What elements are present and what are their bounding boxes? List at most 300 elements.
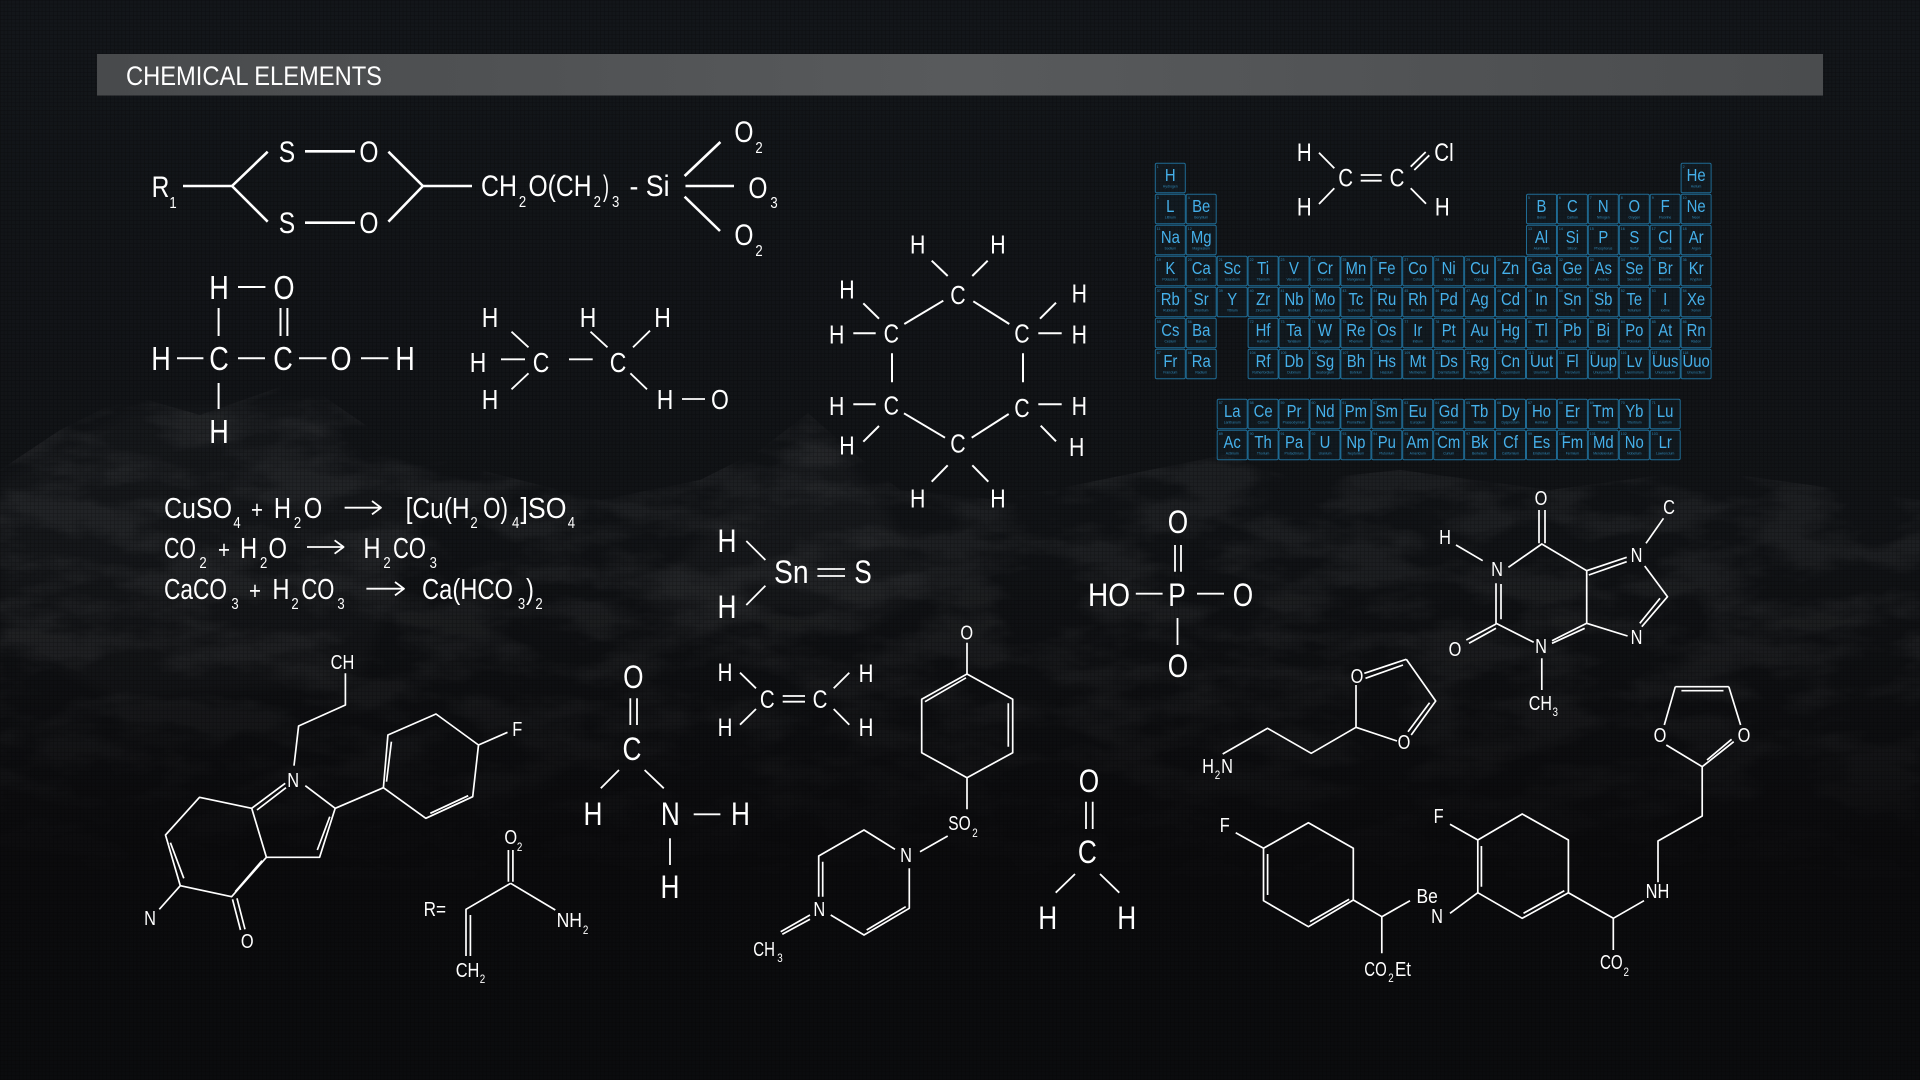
equation 3: 3 (337, 596, 345, 613)
lanthanides and actinides: 96 (1435, 432, 1439, 436)
equation 3: ) (526, 573, 534, 606)
molecule: R1 dithia-dioxane silane (152, 115, 778, 260)
main table: 77 (1404, 320, 1408, 324)
molecule: acrylamide R group: 2 (517, 841, 522, 854)
main table: 26 (1373, 258, 1377, 262)
main table: 38 (1188, 289, 1192, 293)
main table: 76 (1373, 320, 1377, 324)
lanthanides and actinides: 92 (1312, 432, 1316, 436)
molecule: sulfonyl piperazine: 2 (972, 827, 978, 840)
lanthanides and actinides: 71 (1652, 401, 1656, 405)
molecule: R1 dithia-dioxane silane: ) (603, 170, 609, 203)
main table: Br (1658, 259, 1673, 278)
lanthanides and actinides: Ytterbium (1627, 420, 1642, 424)
lanthanides and actinides: 100 (1559, 432, 1565, 436)
equation 1: 2 (294, 515, 301, 532)
molecule: dioxole amine: 2 (1215, 769, 1220, 782)
main table: Potassium (1162, 277, 1178, 281)
main table: Si (1566, 228, 1579, 247)
main table: 32 (1559, 258, 1563, 262)
main table: Kr (1689, 259, 1704, 278)
main table: Osmium (1380, 339, 1393, 343)
molecule: glycolic structure H-O / H-C-C-O-H: H (209, 415, 229, 451)
main table: Ca (1192, 259, 1212, 278)
title: CHEMICAL ELEMENTS (126, 61, 382, 91)
main table: Copper (1474, 277, 1486, 281)
main table: Xenon (1691, 308, 1701, 312)
molecule: R1 dithia-dioxane silane: - Si (630, 170, 670, 203)
lanthanides and actinides: Th (1254, 433, 1272, 452)
lanthanides and actinides: Sm (1376, 402, 1398, 421)
molecule: ethanol: H (470, 348, 486, 379)
molecule: R1 dithia-dioxane silane: O (748, 171, 768, 205)
equation 2: O (268, 532, 287, 565)
molecule: fluoro aryl amine chain: F (1434, 804, 1444, 827)
lanthanides and actinides: Thorium (1257, 451, 1269, 455)
main table: Rhenium (1349, 339, 1363, 343)
main table: 56 (1188, 320, 1192, 324)
main table: 11 (1157, 227, 1161, 231)
main table: Iron (1384, 277, 1390, 281)
lanthanides and actinides: Np (1346, 433, 1365, 452)
molecule: ethylene: C (760, 685, 775, 713)
main table: Manganese (1347, 277, 1365, 281)
main table: 17 (1652, 227, 1656, 231)
main table: 88 (1188, 351, 1192, 355)
main table: Darmstadtium (1438, 370, 1459, 374)
main table: 24 (1312, 258, 1316, 262)
main table: Hafnium (1257, 339, 1269, 343)
main table: Barium (1196, 339, 1207, 343)
main table: Uuo (1682, 352, 1710, 371)
main table: 52 (1621, 289, 1625, 293)
lanthanides and actinides: Praseodymium (1283, 420, 1305, 424)
lanthanides and actinides: U (1320, 433, 1330, 452)
lanthanides and actinides: Cerium (1258, 420, 1269, 424)
lanthanides and actinides: 90 (1250, 432, 1254, 436)
main table: O (1629, 197, 1640, 216)
molecule: fluoro aryl amine chain: F (1220, 813, 1230, 836)
main table: Beryllium (1194, 215, 1208, 219)
molecule: ethylene: H (718, 658, 732, 686)
molecule: urea-like formamide: H (731, 798, 750, 833)
main table: Mn (1346, 259, 1366, 278)
main table: As (1595, 259, 1612, 278)
molecule: vinyl chloride: H (1297, 192, 1312, 221)
molecule: caffeine: C (1663, 495, 1675, 518)
main table: In (1535, 290, 1548, 309)
main table: Oxygen (1628, 215, 1640, 219)
main table: 86 (1683, 320, 1687, 324)
main table: Pt (1442, 321, 1456, 340)
main table: S (1629, 228, 1639, 247)
molecule: cyclohexane: H (1072, 280, 1087, 309)
molecule: ethanol: H (657, 385, 673, 416)
main table: Platinum (1442, 339, 1455, 343)
main table: Aluminium (1534, 246, 1549, 250)
molecule: formaldehyde: H (1117, 902, 1136, 937)
lanthanides and actinides: 70 (1621, 401, 1625, 405)
equation 2: H (363, 532, 381, 565)
lanthanides and actinides: Tb (1471, 402, 1488, 421)
molecule: glycolic structure H-O / H-C-C-O-H: H (151, 342, 171, 378)
molecule: cyclohexane: H (990, 484, 1006, 514)
main table: Vanadium (1286, 277, 1302, 281)
lanthanides and actinides: 60 (1312, 401, 1316, 405)
main table: Ruthenium (1379, 308, 1395, 312)
molecule: vinyl chloride: C (1390, 164, 1404, 192)
main table: Rhodium (1411, 308, 1424, 312)
molecule: R1 dithia-dioxane silane: R (152, 170, 169, 204)
main table: Na (1161, 228, 1181, 247)
main table: 118 (1683, 351, 1688, 355)
molecule: R1 dithia-dioxane silane: CH (481, 170, 517, 203)
lanthanides and actinides: 68 (1559, 401, 1563, 405)
molecule: Sn=S (718, 525, 872, 626)
molecule: phosphoric acid: O (1168, 506, 1188, 541)
molecule: glycolic structure H-O / H-C-C-O-H: O (273, 271, 295, 307)
main table: Fl (1566, 352, 1579, 371)
molecule: phosphoric acid: P (1168, 579, 1186, 614)
main table: Sr (1194, 290, 1209, 309)
main table: Zr (1256, 290, 1271, 309)
main table: Cn (1501, 352, 1520, 371)
main table: 45 (1404, 289, 1408, 293)
lanthanides and actinides: Eu (1409, 402, 1427, 421)
lanthanides and actinides: 58 (1250, 401, 1254, 405)
main table: 30 (1497, 258, 1501, 262)
main table: Dubnium (1287, 370, 1301, 374)
molecule: ethanol: H (580, 303, 596, 334)
molecule: R1 dithia-dioxane silane: 3 (612, 194, 619, 211)
main table: B (1537, 197, 1546, 216)
header bar (97, 54, 1823, 96)
molecule: Sn=S: H (718, 525, 736, 560)
main table: 46 (1435, 289, 1439, 293)
equation 2: H (240, 532, 257, 565)
molecule: caffeine: CH (1529, 693, 1552, 715)
main table: 81 (1528, 320, 1532, 324)
main table: 19 (1157, 258, 1161, 262)
equation 1: 4 (512, 515, 519, 532)
lanthanides and actinides: Promethium (1347, 420, 1365, 424)
main table: Ga (1532, 259, 1552, 278)
main table: C (1567, 197, 1578, 216)
molecule: formaldehyde (1038, 765, 1136, 937)
molecule: urea-like formamide: H (661, 871, 679, 906)
molecule: phosphoric acid: O (1168, 650, 1188, 685)
main table: 20 (1188, 258, 1192, 262)
main table: Livermorium (1625, 370, 1644, 374)
molecule: cyclohexane: C (1014, 320, 1030, 349)
equation 2: 2 (260, 555, 267, 572)
main table: 36 (1683, 258, 1687, 262)
lanthanides and actinides: Terbium (1474, 420, 1486, 424)
lanthanides and actinides: Ac (1224, 433, 1241, 452)
main table: I (1663, 290, 1667, 309)
lanthanides and actinides: Erbium (1567, 420, 1578, 424)
main table: Uut (1530, 352, 1554, 371)
molecule: Sn=S: H (718, 591, 736, 626)
molecule: caffeine: H (1439, 525, 1451, 548)
main table: Radon (1691, 339, 1701, 343)
equation 1: CuSO (164, 493, 232, 525)
main table: 112 (1497, 351, 1503, 355)
molecule: acrylamide R group: R= (424, 899, 446, 921)
molecule: R1 dithia-dioxane silane: 2 (594, 194, 601, 211)
lanthanides and actinides: 64 (1435, 401, 1439, 405)
molecule: fluoro aryl amine chain: Et (1395, 959, 1411, 981)
lanthanides and actinides: Cm (1437, 433, 1460, 452)
main table: 85 (1652, 320, 1656, 324)
molecule: formaldehyde: C (1078, 836, 1097, 871)
molecule: cyclohexane (829, 230, 1087, 514)
molecule: cyclohexane: H (839, 431, 855, 461)
main table: Meitnerium (1409, 370, 1426, 374)
main table: Titanium (1257, 277, 1270, 281)
lanthanides and actinides: 67 (1528, 401, 1532, 405)
lanthanides and actinides: Dy (1501, 402, 1520, 421)
molecule: R1 dithia-dioxane silane: 3 (770, 195, 778, 212)
main table: 16 (1621, 227, 1625, 231)
main table: Chlorine (1659, 246, 1672, 250)
main table: Te (1626, 290, 1642, 309)
main table: Strontium (1194, 308, 1208, 312)
main table: 111 (1466, 351, 1472, 355)
main table: Ti (1257, 259, 1269, 278)
main table: At (1658, 321, 1673, 340)
equation 2: 2 (199, 555, 207, 572)
lanthanides and actinides: No (1625, 433, 1644, 452)
equation 3: + (249, 576, 261, 604)
main table: Cd (1501, 290, 1520, 309)
main table: Sb (1594, 290, 1612, 309)
lanthanides and actinides: Americium (1410, 451, 1426, 455)
main table: Nitrogen (1597, 215, 1610, 219)
main table: 3 (1157, 196, 1159, 200)
equation 1: + (251, 495, 263, 523)
molecule: glycolic structure H-O / H-C-C-O-H: H (395, 342, 415, 378)
lanthanides and actinides: Cf (1503, 433, 1518, 452)
main table: Calcium (1195, 277, 1207, 281)
molecule: cyclohexane: H (910, 230, 925, 260)
main table: 48 (1497, 289, 1501, 293)
molecule: sulfonyl piperazine: CH (753, 939, 775, 961)
main table: 107 (1342, 351, 1348, 355)
molecule: ethanol: H (654, 303, 671, 334)
lanthanides and actinides: 103 (1652, 432, 1658, 436)
molecule: glycolic structure H-O / H-C-C-O-H: C (209, 342, 229, 378)
main table: Ununseptium (1655, 370, 1675, 374)
lanthanides and actinides: Europium (1410, 420, 1425, 424)
main table: Rf (1256, 352, 1271, 371)
main table: 8 (1621, 196, 1623, 200)
lanthanides and actinides: Samarium (1379, 420, 1395, 424)
main table: Ar (1689, 228, 1704, 247)
equation 1: 2 (470, 515, 478, 532)
equation 3: Ca(HCO (422, 574, 513, 606)
main table: 25 (1342, 258, 1346, 262)
lanthanides and actinides: 98 (1497, 432, 1501, 436)
main table: Technetium (1347, 308, 1365, 312)
lanthanides and actinides: Gd (1439, 402, 1459, 421)
lanthanides and actinides: 57 (1219, 401, 1223, 405)
main table: Tin (1570, 308, 1575, 312)
main table: Fe (1378, 259, 1395, 278)
main table: Re (1346, 321, 1365, 340)
main table: Scandium (1225, 277, 1240, 281)
equation 3: 3 (231, 596, 239, 613)
molecule: sulfonyl piperazine (753, 621, 1013, 965)
main table: Rn (1687, 321, 1706, 340)
main table: Mercury (1504, 339, 1517, 343)
main table: Po (1625, 321, 1643, 340)
lanthanides and actinides: Fm (1562, 433, 1583, 452)
main table: 54 (1683, 289, 1687, 293)
main table: 114 (1559, 351, 1565, 355)
lanthanides and actinides: Nd (1315, 402, 1335, 421)
molecule: ethylene: H (718, 713, 732, 741)
molecule: acrylamide R group: O (504, 825, 517, 848)
main table: 35 (1652, 258, 1656, 262)
main table: Ru (1377, 290, 1396, 309)
molecule: cyclohexane: H (1072, 392, 1087, 422)
main table: Mt (1409, 352, 1426, 371)
lanthanides and actinides: Neodymium (1316, 420, 1334, 424)
main table: 83 (1590, 320, 1594, 324)
lanthanides and actinides: Lawrencium (1656, 451, 1674, 455)
molecule: phosphoric acid: HO (1088, 577, 1130, 613)
main table: Selenium (1627, 277, 1641, 281)
main table: Bromine (1659, 277, 1672, 281)
main table: 82 (1559, 320, 1563, 324)
lanthanides and actinides: Ho (1532, 402, 1551, 421)
main table: Radium (1195, 370, 1207, 374)
main table: Cl (1658, 228, 1672, 247)
lanthanides and actinides: Bk (1471, 433, 1489, 452)
main table: Fr (1163, 352, 1178, 371)
equation 2: CO (164, 533, 196, 565)
main table: Rg (1470, 352, 1489, 371)
main table: Magnesium (1192, 246, 1210, 250)
molecule: dioxole amine (1202, 659, 1436, 782)
main table: 110 (1435, 351, 1441, 355)
molecule: cyclohexane: H (1072, 320, 1087, 350)
lanthanides and actinides: Berkelium (1472, 451, 1487, 455)
molecule: sulfonyl piperazine: SO (948, 813, 971, 835)
equation 2: 3 (430, 555, 437, 572)
lanthanides and actinides: Californium (1502, 451, 1519, 455)
main table: Ununpentium (1593, 370, 1613, 374)
molecule: vinyl chloride: H (1297, 138, 1312, 166)
main table: Sodium (1165, 246, 1176, 250)
main table: 22 (1250, 258, 1254, 262)
main table: 2 (1683, 165, 1685, 169)
main table: 51 (1590, 289, 1594, 293)
main table: 28 (1435, 258, 1439, 262)
main table: Lv (1627, 352, 1643, 371)
main table: Rutherfordium (1252, 370, 1274, 374)
main table: Tungsten (1318, 339, 1332, 343)
main table: Zn (1502, 259, 1519, 278)
main table: 40 (1250, 289, 1254, 293)
molecule: cyclohexane: H (829, 320, 844, 350)
molecule: R1 dithia-dioxane silane: 2 (755, 243, 763, 260)
lanthanides and actinides: Md (1593, 433, 1614, 452)
molecule: ethanol: C (610, 348, 626, 379)
main table: Antimony (1596, 308, 1611, 312)
main table: Hydrogen (1163, 184, 1178, 188)
main table: 108 (1373, 351, 1379, 355)
main table: V (1289, 259, 1299, 278)
main table: Co (1408, 259, 1427, 278)
main table: Lithium (1165, 215, 1176, 219)
main table: Flerovium (1565, 370, 1580, 374)
lanthanides and actinides: Lu (1657, 402, 1673, 421)
main table: Ni (1442, 259, 1456, 278)
main table: Sulfur (1630, 246, 1639, 250)
main table: Hg (1501, 321, 1520, 340)
molecule: urea-like formamide: C (623, 733, 641, 768)
lanthanides and actinides: 101 (1590, 432, 1596, 436)
molecule: vinyl chloride: Cl (1434, 138, 1454, 166)
main table: N (1598, 197, 1609, 216)
molecule: R1 dithia-dioxane silane: O (734, 115, 754, 149)
lanthanides and actinides: Holmium (1535, 420, 1548, 424)
molecule: caffeine (1439, 486, 1675, 719)
molecule: vinyl chloride: H (1435, 192, 1450, 221)
lanthanides and actinides: 102 (1621, 432, 1627, 436)
molecule: caffeine: N (1631, 625, 1642, 648)
main table: Iodine (1661, 308, 1670, 312)
main table: 42 (1312, 289, 1316, 293)
molecule: glycolic structure H-O / H-C-C-O-H: H (209, 271, 229, 307)
main table: Ta (1286, 321, 1303, 340)
molecule: fluoro aryl amine chain: 2 (1388, 972, 1394, 985)
molecule: dioxole amine: O (1398, 730, 1410, 753)
equation 1: O) (483, 493, 508, 525)
main table: Germanium (1564, 277, 1581, 281)
main table: Cadmium (1503, 308, 1518, 312)
lanthanides and actinides: Es (1533, 433, 1550, 452)
lanthanides and actinides: 89 (1219, 432, 1223, 436)
molecule: fluoro aryl amine chain: O (1738, 723, 1750, 746)
molecule: R1 dithia-dioxane silane: O (359, 135, 379, 169)
molecule: indole derivative: N (287, 768, 299, 791)
main table: 73 (1280, 320, 1284, 324)
equation 3: 3 (518, 596, 525, 613)
lanthanides and actinides: 97 (1466, 432, 1470, 436)
molecule: caffeine: N (1631, 543, 1642, 566)
equation 1: ]SO (520, 493, 566, 525)
main table: 6 (1559, 196, 1561, 200)
lanthanides and actinides: 63 (1404, 401, 1408, 405)
main table: Copernicium (1501, 370, 1520, 374)
molecule: fluoro aryl amine chain: Be (1416, 886, 1438, 908)
lanthanides and actinides: Lutetium (1659, 420, 1672, 424)
molecule: acrylamide R group (424, 825, 588, 986)
molecule: Sn=S: S (854, 556, 872, 591)
main table: Rubidium (1163, 308, 1177, 312)
equation 2: 2 (383, 555, 391, 572)
molecule: urea-like formamide: N (661, 798, 680, 833)
lanthanides and actinides: Protactinium (1285, 451, 1303, 455)
main table: 49 (1528, 289, 1532, 293)
main table: Lead (1569, 339, 1576, 343)
molecule: acrylamide R group: NH (557, 910, 582, 932)
main table: 5 (1528, 196, 1530, 200)
lanthanides and actinides: 69 (1590, 401, 1594, 405)
